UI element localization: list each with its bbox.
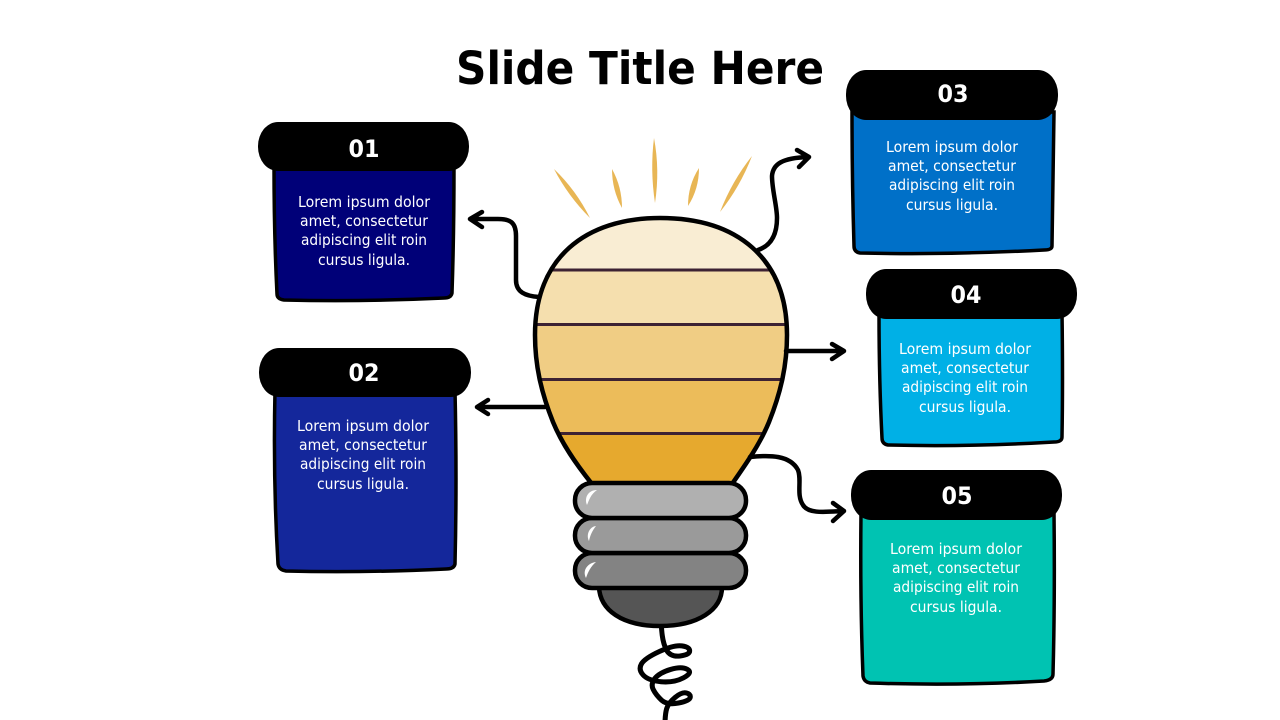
bulb glass bands xyxy=(530,215,792,485)
text 03: adipiscing elit roin xyxy=(889,176,1015,194)
header 02 xyxy=(259,348,471,397)
header 05 xyxy=(851,470,1062,520)
number 02: 02 xyxy=(348,359,380,387)
text 01 xyxy=(298,193,431,269)
text 01: Lorem ipsum dolor xyxy=(298,193,431,211)
text 03: cursus ligula. xyxy=(906,196,998,214)
panel: 05 xyxy=(851,470,1062,684)
text 05 xyxy=(890,540,1023,616)
text 01: cursus ligula. xyxy=(318,251,410,269)
text 02 xyxy=(297,417,430,493)
arrow: to 04 xyxy=(786,344,844,359)
header 03 xyxy=(846,70,1058,120)
base highlights xyxy=(585,490,597,578)
card body 03 xyxy=(852,112,1054,254)
text 05: amet, consectetur xyxy=(892,559,1021,577)
card body 01 xyxy=(274,165,454,301)
bulb outline xyxy=(535,218,787,484)
panel: 03 xyxy=(846,70,1058,254)
text 04: Lorem ipsum dolor xyxy=(899,340,1032,358)
arrow: to 05 xyxy=(750,456,844,521)
text 04 xyxy=(899,340,1032,416)
text 05: cursus ligula. xyxy=(910,598,1002,616)
text 02: amet, consectetur xyxy=(299,436,428,454)
card body 04 xyxy=(879,312,1062,446)
title: Slide Title Here xyxy=(456,42,824,95)
text 02: Lorem ipsum dolor xyxy=(297,417,430,435)
number 01: 01 xyxy=(348,135,380,163)
text 04: amet, consectetur xyxy=(901,359,1030,377)
card body 02 xyxy=(274,390,456,572)
icon: light bulb xyxy=(530,138,792,720)
text 01: amet, consectetur xyxy=(300,212,429,230)
screw base xyxy=(575,483,746,626)
text 03: Lorem ipsum dolor xyxy=(886,138,1019,156)
number 04: 04 xyxy=(950,281,982,309)
light rays xyxy=(554,138,752,218)
panel: 04 xyxy=(866,269,1077,446)
arrow: to 03 xyxy=(758,150,809,250)
text 02: adipiscing elit roin xyxy=(300,455,426,473)
header 04 xyxy=(866,269,1077,319)
arrow: to 02 xyxy=(477,400,545,414)
arrow: to 01 xyxy=(470,212,539,297)
header 01 xyxy=(258,122,469,171)
number 05: 05 xyxy=(942,482,972,510)
panel: 01 xyxy=(258,122,469,301)
text 04: cursus ligula. xyxy=(919,398,1011,416)
text 05: Lorem ipsum dolor xyxy=(890,540,1023,558)
text 05: adipiscing elit roin xyxy=(893,578,1019,596)
text 03 xyxy=(886,138,1019,214)
panel: 02 xyxy=(259,348,471,572)
number 03: 03 xyxy=(938,80,968,108)
text 04: adipiscing elit roin xyxy=(902,378,1028,396)
filament coil xyxy=(640,622,690,720)
text 03: amet, consectetur xyxy=(888,157,1017,175)
card body 05 xyxy=(861,512,1054,684)
text 02: cursus ligula. xyxy=(317,475,409,493)
text 01: adipiscing elit roin xyxy=(301,231,427,249)
